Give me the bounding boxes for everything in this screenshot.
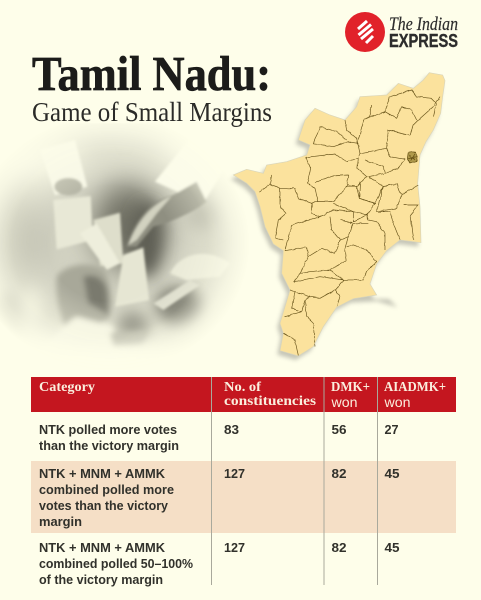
logo: The Indian Express [345,12,458,52]
table header: DMK+ [331,380,370,395]
map of Tamil Nadu [231,73,445,360]
logo wordmark: The Indian [389,14,458,35]
photo: hands holding up voter cards [0,130,236,348]
row 1: 56 [332,422,346,437]
row 1: NTK polled more votes [39,422,177,437]
table header: won [383,394,410,410]
title: Tamil Nadu: [32,46,271,101]
map Chennai dense borders [407,152,417,163]
logo red circle icon [345,12,385,52]
row 3 [39,540,400,587]
row 1: 27 [384,422,398,437]
row 2: 45 [384,466,400,481]
row 3: 45 [384,540,400,555]
subtitle: Game of Small Margins [32,97,272,127]
row 1: than the victory margin [39,438,179,453]
row 2: 127 [224,466,245,481]
logo wordmark: EXPRESS [389,31,458,51]
row 1 [39,422,398,453]
table header: Category [39,380,95,395]
table [31,377,456,587]
row 3: NTK + MNM + AMMK [39,540,165,555]
row 2: NTK + MNM + AMMK [39,466,165,481]
table header: AIADMK+ [384,380,446,395]
row 2: combined polled more [39,482,174,497]
row 3: combined polled 50–100% [39,556,193,571]
row 2 background [31,461,456,533]
logo wordmark [389,14,458,51]
row 2 [39,466,400,529]
photo fade into bottom background [0,352,267,418]
table header [31,377,456,412]
map state shape [233,73,445,356]
table header: constituencies [224,394,317,409]
table header: No. of [224,380,261,395]
row 3: of the victory margin [39,572,163,587]
row 3: 82 [332,540,346,555]
photo lower hands [54,262,143,346]
row 3: 127 [224,540,245,555]
row 2: margin [39,514,82,529]
map drop shadow [231,77,442,360]
map district borders [259,90,440,356]
row 2: votes than the victory [39,498,169,513]
table header: won [330,394,358,410]
photo cards and hands [40,138,230,310]
photo shadows [5,156,184,286]
row 1: 83 [224,422,239,437]
row 2: 82 [332,466,346,481]
